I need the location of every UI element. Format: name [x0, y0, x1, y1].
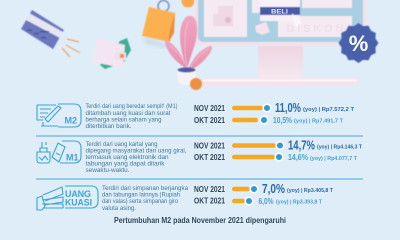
panel: M1	[37, 138, 363, 174]
description: Uang Kuasi: dan tabungan lainnya (Rupiah	[102, 192, 181, 198]
description: Uang Kuasi: valuta asing.	[102, 205, 136, 212]
illustration: wallet	[93, 38, 131, 69]
illustration: computer monitor	[194, 0, 367, 80]
illustration: spark lines	[62, 39, 80, 57]
row: M1 November 2021: NOV 2021	[194, 142, 225, 150]
row: M2 Oktober 2021: 10,5%	[273, 116, 292, 125]
description: M2: diterbitkan bank.	[86, 123, 132, 130]
row: Uang Kuasi November 2021	[194, 182, 334, 196]
row: Uang Kuasi November 2021: NOV 2021	[194, 185, 225, 194]
row: Uang Kuasi Oktober 2021: (yoy) | Rp3.393,8 T	[276, 200, 323, 206]
illustration: orange ball	[190, 78, 202, 90]
row: M1 Oktober 2021	[194, 153, 358, 162]
row: M2 Oktober 2021: OKT 2021	[194, 116, 225, 125]
icon: Uang Kuasi banknotes	[37, 186, 98, 210]
illustration: pink plant	[165, 16, 212, 71]
row: Uang Kuasi Oktober 2021	[194, 196, 323, 206]
row: Uang Kuasi November 2021: 7,0%	[262, 182, 285, 196]
row: Uang Kuasi November 2021: (yoy) | Rp3.405,8 T	[287, 188, 334, 194]
badge: percent	[338, 23, 378, 63]
description: M1: Terdiri dari uang kartal yang	[86, 141, 158, 148]
label: DISKON: DISKON	[286, 23, 344, 35]
description: M1: tabungan yang dapat ditarik	[86, 160, 165, 168]
row: M1 November 2021: (yoy) | Rp4.146,3 T	[317, 144, 363, 150]
button label: BELI: BELI	[271, 8, 288, 16]
row: M2 Oktober 2021: (yoy) | Rp7.491,7 T	[294, 118, 344, 124]
row: M1 Oktober 2021: 14,6%	[288, 153, 308, 162]
row: M2 Oktober 2021	[194, 116, 344, 125]
badge: percent: %	[349, 31, 368, 56]
row: M2 November 2021: (yoy) | Rp7.572,2 T	[303, 107, 355, 113]
row: M1 November 2021	[194, 138, 363, 152]
dividers	[36, 136, 363, 179]
illustration: shopping bag	[142, 0, 175, 48]
row: M2 November 2021: NOV 2021	[194, 104, 225, 113]
row: M2 November 2021	[194, 101, 355, 115]
description: Uang Kuasi: Terdiri dari simpanan berjangka	[102, 185, 189, 192]
illustration: keyboard	[202, 78, 359, 86]
icon: M2 document and pen	[37, 104, 81, 127]
badge label: M2: M2	[64, 116, 77, 126]
row: Uang Kuasi Oktober 2021: OKT 2021	[194, 196, 225, 206]
description: M2: Terdiri dari uang beredar sempit¹ (M1)	[86, 103, 178, 110]
description: M2: ditambah uang kuasi dan surat	[86, 110, 171, 117]
badge label: Uang Kuasi: KUASI	[65, 198, 92, 208]
badge label: Uang Kuasi: UANG	[65, 189, 91, 199]
description: M1: termasuk uang elektronik dan	[86, 154, 169, 161]
icon: M1 jar and banknote	[37, 141, 81, 163]
panel: M2	[37, 101, 355, 130]
badge label: M1: M1	[66, 152, 79, 162]
description: M1: sewaktu-waktu.	[86, 167, 130, 174]
illustration: credit card	[21, 10, 64, 49]
description: M1: dipegang masyarakat dan uang giral,	[86, 148, 187, 154]
footer text: Pertumbuhan M2 pada November 2021 dipengaruhi	[114, 216, 286, 225]
illustration: plant pot	[177, 68, 196, 85]
panel: Uang Kuasi	[37, 182, 334, 212]
row: Uang Kuasi Oktober 2021: 6,0%	[258, 197, 274, 206]
row: M1 Oktober 2021: (yoy) | Rp4.077,7 T	[310, 156, 358, 162]
row: M2 November 2021: 11,0%	[275, 101, 301, 115]
description: Uang Kuasi: dan valas) serta simpanan giro	[102, 198, 178, 205]
row: M1 November 2021: 14,7%	[288, 138, 315, 152]
description: M2: berharga selain saham yang	[86, 116, 162, 124]
illustration: orange ball top	[182, 0, 194, 8]
row: M1 Oktober 2021: OKT 2021	[194, 153, 225, 162]
